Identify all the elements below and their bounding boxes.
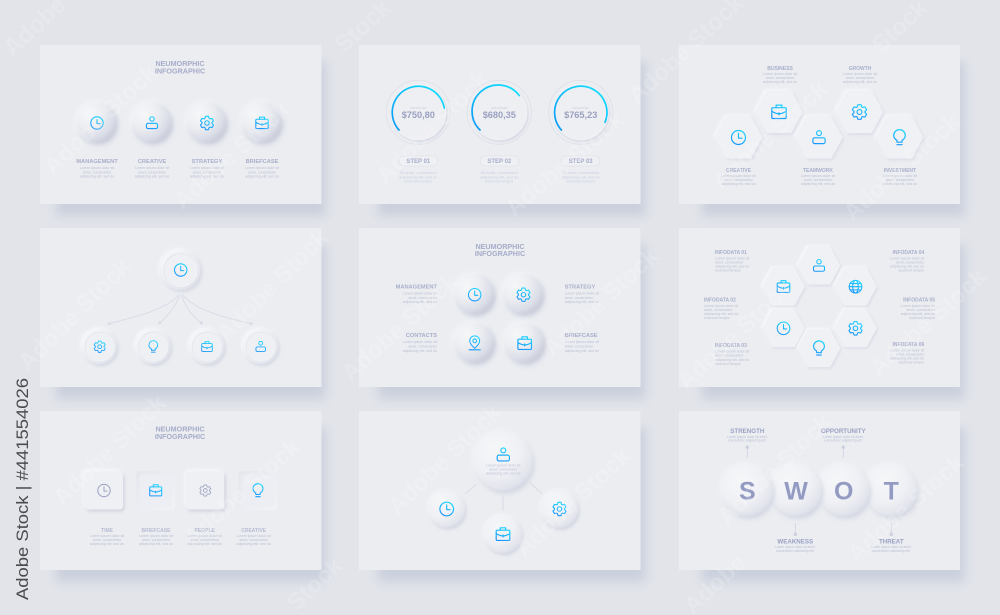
- step 01 pill and text: adipiscing elit, sed do: [399, 174, 438, 179]
- text: time: [90, 528, 124, 546]
- title: NEUMORPHIC: [475, 242, 525, 251]
- watermarks: Adobe Stock: [672, 275, 798, 395]
- text: teamwork: Lorem ipsum dolor sit: [801, 174, 835, 178]
- panel background: [679, 411, 960, 570]
- text: creative: [237, 528, 271, 546]
- text: creative: adipiscing elit, sed do: [135, 175, 169, 179]
- text: briefcase: amet, consectetur: [142, 538, 171, 542]
- step 01 pill and text: Sit amet, consectetur: [400, 170, 438, 175]
- text: management: Lorem ipsum dolor sit: [80, 166, 114, 170]
- hexagon: clock: [762, 309, 804, 347]
- text: investment: adipiscing elit, sed do: [883, 182, 917, 186]
- watermarks: Adobe Stock: [713, 408, 837, 530]
- panel: hierarchy tree: [40, 228, 322, 387]
- watermarks: Adobe Stock: [838, 108, 966, 227]
- watermarks: Adobe Stock: [538, 242, 664, 362]
- text: infodata 06: eiusmod tempor: [899, 360, 925, 364]
- text: creative: adipiscing elit, sed do: [237, 542, 271, 546]
- text: infodata 02: Lorem ipsum dolor sit: [704, 304, 738, 308]
- text: people: amet, consectetur: [190, 538, 220, 542]
- text: infodata 02: [704, 297, 738, 320]
- panel background: [40, 45, 322, 204]
- text: infodata 02: amet, consectetur: [704, 308, 733, 312]
- panel background: [679, 228, 960, 387]
- text: briefcase: BRIEFCASE: [565, 333, 598, 339]
- panel: three progress dials: [359, 45, 640, 204]
- step 03 pill and text: STEP 03: [569, 159, 593, 165]
- step 01 pill and text: STEP 01: [406, 159, 431, 165]
- step 02 pill and text: STEP 02: [487, 159, 512, 165]
- text: briefcase: [139, 528, 173, 546]
- text: infodata 05: [901, 297, 936, 320]
- panel: four spheres with title: [40, 45, 322, 204]
- text: infodata 01: INFODATA 01: [715, 250, 747, 256]
- hexagon: clock: [715, 116, 762, 158]
- step 03 pill and text: eiusmod tempor: [566, 179, 596, 184]
- text: infodata 03: eiusmod tempor: [715, 362, 742, 366]
- text: infodata 01: adipiscing elit, sed do: [715, 264, 749, 268]
- step 01 pill and text: [399, 156, 438, 184]
- sphere: T: [864, 463, 918, 518]
- text: opportunity: Lorem ipsum dolor sit amet,: [823, 435, 864, 439]
- sphere: creative: [130, 101, 173, 145]
- panel: six hexagon ring: [679, 228, 960, 387]
- text: creative: Lorem ipsum dolor sit: [237, 534, 271, 538]
- text: strategy: STRATEGY: [565, 284, 595, 290]
- text: contacts: Lorem ipsum dolor sit: [403, 340, 437, 344]
- text: growth: adipiscing elit, sed do: [843, 80, 877, 84]
- watermarks: Stock: [282, 552, 348, 615]
- text: teamwork: amet, consectetur: [804, 178, 833, 182]
- text: briefcase: BRIEFCASE: [142, 528, 171, 534]
- text: briefcase: Lorem ipsum dolor sit: [245, 166, 279, 170]
- dial: step 03: $765,23: [564, 110, 597, 120]
- text: creative: amet, consectetur: [724, 178, 754, 182]
- step 03 pill and text: adipiscing elit, sed do: [562, 174, 601, 179]
- watermarks: Adobe Stock: [500, 106, 631, 222]
- title: INFOGRAPHIC: [155, 66, 205, 75]
- sphere: T: T: [884, 477, 899, 505]
- text: management: amet, consectetur: [83, 170, 112, 174]
- text: growth: GROWTH: [849, 66, 872, 72]
- text: infodata 03: adipiscing elit, sed do: [715, 358, 749, 362]
- watermarks: Adobe Stock: [707, 75, 833, 195]
- sphere: O: [816, 463, 870, 518]
- text: management: MANAGEMENT: [396, 284, 438, 290]
- text: infodata 04: [890, 250, 925, 272]
- watermarks: Adobe Stock: [383, 398, 507, 520]
- text: threat: consectetur adipiscing elit.: [872, 549, 911, 553]
- text: contacts: CONTACTS: [406, 333, 437, 339]
- text: people: Lorem ipsum dolor sit: [188, 534, 222, 538]
- panel background: [679, 45, 960, 204]
- text: creative: CREATIVE: [138, 159, 166, 165]
- hexagon: gear: [836, 91, 883, 133]
- arrows: tree branches: [108, 295, 253, 325]
- text: weakness: Lorem ipsum dolor sit amet,: [775, 545, 816, 549]
- sphere: S: [720, 463, 774, 518]
- text: threat: [871, 538, 912, 553]
- step 02 pill and text: adipiscing elit, sed do: [480, 174, 519, 179]
- watermarks: Adobe Stock: [39, 58, 163, 180]
- watermarks: Adobe Stock: [13, 253, 137, 376]
- dial: step 01: [386, 80, 450, 144]
- hexagon: gear: [834, 309, 876, 347]
- text: infodata 06: adipiscing elit, sed do: [890, 356, 924, 360]
- text: infodata 06: INFODATA 06: [892, 342, 925, 348]
- text: threat: THREAT: [879, 538, 904, 546]
- hexagon: person: [798, 247, 840, 285]
- hub sphere with person icon and text: [472, 430, 534, 493]
- text: infodata 05: INFODATA 05: [903, 297, 935, 303]
- text: infodata 01: eiusmod tempor: [715, 268, 742, 272]
- text: management: amet, consectetur: [408, 296, 438, 300]
- dial: step 02: [467, 80, 531, 144]
- connectors with dots: [746, 446, 893, 536]
- adobe stock side label: Adobe Stock | #441554026: [13, 378, 32, 600]
- panel: four square tiles: [40, 411, 322, 570]
- text: briefcase: adipiscing elit, sed do: [565, 349, 599, 353]
- sphere: management: [75, 101, 118, 145]
- text: briefcase: adipiscing elit, sed do: [139, 542, 173, 546]
- text: creative: Lorem ipsum dolor sit: [135, 166, 169, 170]
- text: strategy: [190, 159, 224, 179]
- hub sphere with person icon and text: adipiscing elit, sed do: [486, 471, 520, 475]
- text: threat: Lorem ipsum dolor sit amet,: [871, 545, 912, 549]
- text: investment: [883, 168, 917, 186]
- hexagon: briefcase: [756, 91, 802, 133]
- text: strategy: Lorem ipsum dolor sit: [565, 292, 599, 296]
- text: opportunity: consectetur adipiscing elit.: [824, 438, 863, 442]
- sphere: clock: [427, 489, 466, 529]
- text: growth: Lorem ipsum dolor sit: [843, 72, 877, 76]
- text: creative: CREATIVE: [241, 528, 267, 534]
- text: creative: [135, 159, 169, 179]
- watermarks: Adobe Stock: [168, 96, 296, 215]
- node: gear: [81, 328, 118, 366]
- text: business: adipiscing elit, sed do: [763, 80, 797, 84]
- hexagon: globe: [834, 268, 876, 306]
- panel background: [359, 45, 640, 204]
- watermarks: Adobe Stock: [864, 263, 992, 382]
- text: infodata 05: eiusmod tempor: [909, 316, 936, 320]
- text: investment: amet, consectetur: [886, 178, 915, 182]
- text: infodata 06: Lorem ipsum dolor sit: [890, 348, 924, 352]
- panel: hub and spokes: [359, 411, 640, 570]
- text: management: [76, 159, 118, 179]
- text: teamwork: [801, 168, 835, 186]
- text: infodata 05: adipiscing elit, sed do: [901, 312, 935, 316]
- text: business: Lorem ipsum dolor sit: [763, 72, 797, 76]
- text: infodata 04: adipiscing elit, sed do: [890, 264, 924, 268]
- step 02 pill and text: eiusmod tempor: [485, 179, 514, 184]
- text: infodata 05: amet, consectetur: [906, 308, 936, 312]
- text: briefcase: Lorem ipsum dolor sit: [565, 340, 599, 344]
- hub sphere with person icon and text: amet, consectetur: [489, 467, 518, 471]
- text: strategy: Lorem ipsum dolor sit: [190, 166, 224, 170]
- dial: step 02: Lorem ipsum dolor: [491, 108, 508, 110]
- sphere: S: S: [739, 477, 756, 505]
- watermarks: Adobe Stock: [842, 449, 970, 568]
- text: infodata 03: amet, consectetur: [715, 354, 744, 358]
- tile: people: [185, 470, 226, 512]
- text: strength: Lorem ipsum dolor sit amet,: [727, 435, 768, 439]
- sphere: clock: [453, 273, 496, 317]
- text: time: adipiscing elit, sed do: [90, 542, 124, 546]
- text: growth: amet, consectetur: [846, 76, 875, 80]
- sphere: pin: [453, 321, 496, 365]
- title: INFOGRAPHIC: [155, 432, 205, 441]
- title: NEUMORPHIC: [155, 59, 205, 68]
- text: creative: amet, consectetur: [239, 538, 269, 542]
- top node: clock: [159, 248, 202, 292]
- text: investment: INVESTMENT: [884, 168, 916, 174]
- watermarks: Adobe Stock: [178, 433, 306, 552]
- text: infodata 04: INFODATA 04: [892, 250, 925, 256]
- watermarks: Adobe Stock: [211, 224, 335, 347]
- watermarks: Adobe Stock: [336, 268, 464, 387]
- text: opportunity: OPPORTUNITY: [821, 428, 867, 435]
- sphere: W: [769, 463, 823, 518]
- text: strategy: amet, consectetur: [565, 296, 594, 300]
- text: infodata 05: Lorem ipsum dolor sit: [901, 304, 935, 308]
- text: briefcase: [245, 159, 279, 179]
- text: creative: adipiscing elit, sed do: [721, 182, 756, 186]
- step 03 pill and text: [561, 156, 601, 184]
- hexagon: briefcase: [762, 268, 804, 306]
- text: infodata 03: [715, 343, 749, 366]
- text: infodata 06: amet, consectetur: [896, 352, 925, 356]
- title: NEUMORPHIC: [155, 425, 205, 434]
- text: infodata 02: eiusmod tempor: [704, 316, 731, 320]
- text: strategy: amet, consectetur: [193, 170, 222, 174]
- text: strength: consectetur adipiscing elit.: [728, 438, 767, 442]
- text: infodata 04: Lorem ipsum dolor sit: [890, 256, 924, 260]
- tile: briefcase: [136, 471, 175, 510]
- watermarks: Adobe Stock: [510, 442, 636, 562]
- panel: five hexagons: [679, 45, 960, 204]
- text: contacts: adipiscing elit, sed do: [403, 349, 437, 353]
- text: people: adipiscing elit, sed do: [188, 542, 222, 546]
- sphere: strategy: [185, 101, 228, 145]
- hexagon: bulb: [876, 116, 923, 158]
- dial: step 03: Lorem ipsum dolor: [572, 108, 589, 110]
- text: creative: CREATIVE: [726, 168, 752, 174]
- node: person: [242, 328, 279, 366]
- text: infodata 02: adipiscing elit, sed do: [704, 312, 738, 316]
- hexagon: bulb: [798, 329, 840, 367]
- dial: step 02: $680,35: [483, 110, 516, 120]
- text: infodata 03: Lorem ipsum dolor sit: [715, 350, 749, 354]
- panel background: [40, 228, 322, 387]
- tile: time: [84, 470, 124, 512]
- text: business: BUSINESS: [767, 66, 793, 72]
- connectors: [465, 483, 542, 511]
- text: opportunity: [821, 428, 867, 442]
- node: bulb: [134, 328, 172, 366]
- text: contacts: [403, 333, 438, 353]
- text: strategy: adipiscing elit, sed do: [565, 300, 599, 304]
- text: time: amet, consectetur: [93, 538, 122, 542]
- watermarks: Adobe Stock: [371, 66, 495, 189]
- step 01 pill and text: eiusmod tempor: [404, 179, 433, 184]
- text: strategy: adipiscing elit, sed do: [190, 175, 224, 179]
- text: creative: Lorem ipsum dolor sit: [721, 174, 756, 178]
- panel background: [359, 228, 640, 387]
- text: business: [763, 66, 797, 84]
- text: management: [396, 284, 438, 304]
- text: teamwork: TEAMWORK: [803, 168, 833, 174]
- text: briefcase: amet, consectetur: [248, 170, 277, 174]
- text: management: MANAGEMENT: [76, 159, 118, 165]
- sphere: briefcase: [483, 514, 523, 555]
- text: infodata 01: amet, consectetur: [715, 260, 744, 264]
- sphere: W: W: [784, 477, 808, 505]
- text: management: adipiscing elit, sed do: [80, 175, 114, 179]
- hub sphere with person icon and text: Lorem ipsum dolor sit: [486, 463, 520, 467]
- dial: step 01: Lorem ipsum dolor: [410, 108, 427, 110]
- dial: step 03: [549, 80, 613, 144]
- text: infodata 03: INFODATA 03: [715, 343, 747, 349]
- step 03 pill and text: Sit amet, consectetur: [562, 170, 600, 175]
- panel: four spheres grid: [359, 228, 640, 387]
- text: strategy: [565, 284, 599, 304]
- hexagon: person: [796, 116, 842, 158]
- text: contacts: amet, consectetur: [408, 344, 438, 348]
- text: strategy: STRATEGY: [192, 159, 222, 165]
- text: teamwork: adipiscing elit, sed do: [801, 182, 835, 186]
- text: creative: amet, consectetur: [138, 170, 167, 174]
- sphere: gear: [502, 273, 544, 317]
- text: infodata 04: amet, consectetur: [896, 260, 925, 264]
- text: time: Lorem ipsum dolor sit: [90, 534, 124, 538]
- step 02 pill and text: Sit amet, consectetur: [481, 170, 519, 175]
- text: infodata 01: Lorem ipsum dolor sit: [715, 256, 749, 260]
- text: briefcase: [565, 333, 599, 353]
- sphere: briefcase: [240, 101, 283, 145]
- step 02 pill and text: [480, 156, 519, 184]
- text: infodata 01: [715, 250, 749, 272]
- text: investment: Lorem ipsum dolor sit: [883, 174, 917, 178]
- text: briefcase: BRIEFCASE: [246, 159, 279, 165]
- text: briefcase: adipiscing elit, sed do: [245, 175, 279, 179]
- title: INFOGRAPHIC: [475, 249, 525, 258]
- text: weakness: [775, 538, 816, 553]
- sphere: O: O: [834, 477, 853, 505]
- text: business: amet, consectetur: [766, 76, 795, 80]
- text: people: [188, 528, 222, 546]
- panel background: [359, 411, 640, 570]
- text: weakness: WEAKNESS: [777, 538, 813, 546]
- text: management: adipiscing elit, sed do: [403, 300, 437, 304]
- text: briefcase: Lorem ipsum dolor sit: [139, 534, 173, 538]
- sphere: gear: [539, 489, 579, 530]
- watermarks: Adobe Stock: [48, 389, 172, 511]
- sphere: briefcase: [503, 321, 546, 365]
- text: briefcase: amet, consectetur: [565, 344, 594, 348]
- node: briefcase: [188, 328, 225, 366]
- text: management: Lorem ipsum dolor sit: [403, 292, 437, 296]
- text: strength: [727, 428, 768, 442]
- text: time: TIME: [101, 528, 114, 534]
- text: creative: [721, 168, 756, 186]
- dial: step 01: $750,80: [402, 110, 435, 120]
- text: infodata 04: eiusmod tempor: [899, 268, 925, 272]
- text: weakness: consectetur adipiscing elit.: [776, 549, 815, 553]
- text: growth: [843, 66, 877, 84]
- text: people: PEOPLE: [195, 528, 215, 534]
- tile: creative: [239, 471, 277, 510]
- text: infodata 06: [890, 342, 925, 364]
- text: infodata 02: INFODATA 02: [704, 297, 736, 303]
- panel: SWOT: [679, 411, 960, 570]
- panel background: [40, 411, 322, 570]
- text: strength: STRENGTH: [730, 428, 765, 435]
